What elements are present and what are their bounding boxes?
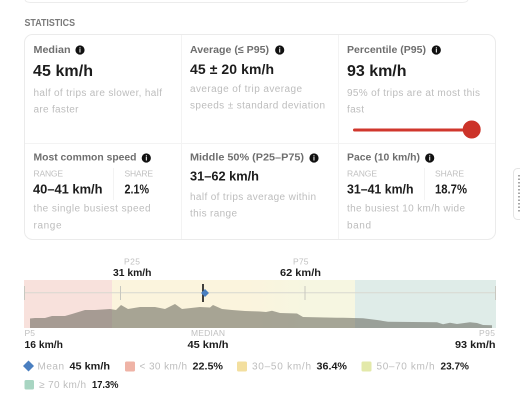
stat: median: i <box>79 48 81 54</box>
stat: most common speed: SHARE <box>124 168 153 178</box>
stat: median: Median <box>34 44 70 56</box>
stat: middle 50% <box>190 152 319 220</box>
label: median <box>188 328 228 351</box>
legend: 30-50 <box>237 360 348 372</box>
stat: average: speeds ± standard deviation <box>190 100 325 112</box>
stat: percentile: i <box>435 48 437 54</box>
legend: under 30: < 30 km/h <box>140 362 187 372</box>
legend: 30-50: 30–50 km/h <box>252 362 311 372</box>
label: P5: 16 km/h <box>24 339 63 351</box>
label: median: 45 km/h <box>188 339 228 351</box>
stat: pace: 31–41 km/h <box>347 182 414 196</box>
stat: median <box>33 44 162 116</box>
stat: most common speed: Most common speed <box>34 152 136 164</box>
stat: most common speed <box>33 152 153 232</box>
stat: pace: RANGE <box>347 168 377 178</box>
stat: median: 45 km/h <box>33 63 93 80</box>
legend: mean: 45 km/h <box>70 360 110 372</box>
stat: most common speed: i <box>145 156 147 162</box>
label: P5: P5 <box>24 328 35 338</box>
stat: pace: 18.7% <box>435 182 467 196</box>
stat: average: Average (≤ P95) <box>190 44 269 56</box>
label: P95 <box>455 328 496 351</box>
stat: average: average of trip average <box>190 84 302 95</box>
stat: percentile <box>347 44 481 138</box>
stat: pace: the busiest 10 km/h wide <box>347 204 465 215</box>
label: P75: 62 km/h <box>280 267 321 279</box>
stat: average: i <box>279 48 281 54</box>
stat: percentile: Percentile (P95) <box>347 44 426 56</box>
panel: statistics card <box>24 34 496 240</box>
legend <box>23 360 470 391</box>
legend: under 30 <box>125 360 224 372</box>
stat: middle 50%: Middle 50% (P25–P75) <box>190 152 304 164</box>
label: P95: 93 km/h <box>455 339 496 351</box>
stat: most common speed: the single busiest speed <box>34 204 150 215</box>
legend: 30-50: 36.4% <box>316 360 348 372</box>
heading: statistics: STATISTICS <box>24 18 75 29</box>
legend: mean <box>23 360 110 372</box>
stat: percentile: fast <box>347 105 364 116</box>
stat: percentile: 95% of trips are at most this <box>347 88 480 99</box>
stat: most common speed: RANGE <box>34 168 63 178</box>
chart: speed distribution <box>24 280 496 328</box>
label: P25: 31 km/h <box>113 267 152 279</box>
stat: median: are faster <box>34 105 79 116</box>
label: P5 <box>24 328 63 351</box>
side handle <box>514 168 520 220</box>
stat: percentile: 93 km/h <box>347 63 406 80</box>
stat: pace: SHARE <box>435 168 464 178</box>
legend: 50-70: 23.7% <box>440 360 470 372</box>
label: P25 <box>113 256 152 279</box>
stat: median: half of trips are slower, half <box>34 88 162 99</box>
label: P95: P95 <box>479 328 495 338</box>
label: median: MEDIAN <box>191 328 225 338</box>
legend: 70 and over: 17.3% <box>92 379 119 391</box>
legend: under 30: 22.5% <box>192 360 224 372</box>
stat: most common speed: 40–41 km/h <box>33 182 103 196</box>
slider: P95 position <box>353 120 481 138</box>
legend: 70 and over: ≥ 70 km/h <box>39 380 86 391</box>
stat: middle 50%: half of trips average within <box>190 192 316 203</box>
stat: pace: band <box>347 220 371 232</box>
stat: middle 50%: 31–62 km/h <box>190 169 259 184</box>
legend: 50-70 <box>362 360 470 372</box>
legend: 70 and over <box>24 379 119 391</box>
label: P75 <box>280 256 321 279</box>
label: P25: P25 <box>124 256 140 266</box>
stat: average <box>190 44 325 112</box>
stat: pace <box>347 152 467 232</box>
stat: middle 50%: this range <box>190 208 237 220</box>
stat: pace: i <box>429 156 431 162</box>
stat: average: 45 ± 20 km/h <box>190 61 274 77</box>
legend: mean: Mean <box>38 362 64 372</box>
stat: most common speed: range <box>34 220 62 232</box>
stat: pace: Pace (10 km/h) <box>347 152 420 164</box>
legend: 50-70: 50–70 km/h <box>376 362 434 372</box>
stat: most common speed: 2.1% <box>124 182 149 196</box>
label: P75: P75 <box>293 256 309 266</box>
stat: middle 50%: i <box>313 156 315 162</box>
